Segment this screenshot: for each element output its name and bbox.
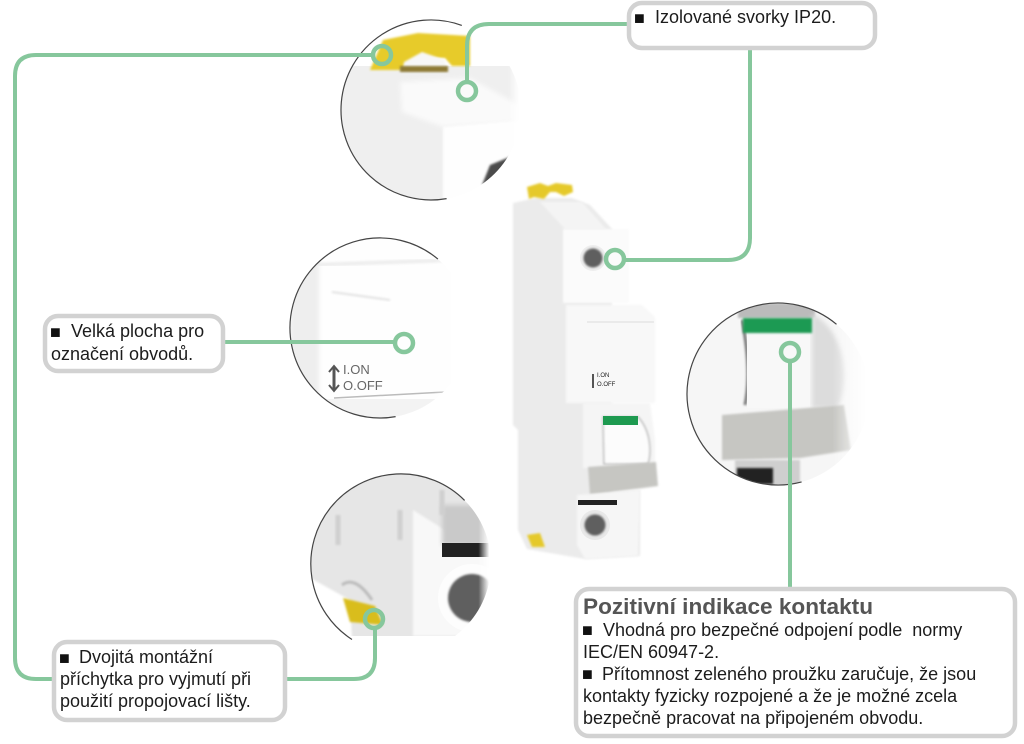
callout: double mounting clip: Dvojitá montážní xyxy=(79,647,213,667)
callout: double mounting clip: ■ xyxy=(59,648,70,668)
callout body text: IEC/EN 60947-2. xyxy=(583,642,719,662)
callout: positive contact indication xyxy=(576,589,1015,736)
callout body text: ■ xyxy=(582,664,593,684)
connector: green indicator line xyxy=(781,343,799,590)
connector: labelling area line xyxy=(222,334,413,352)
circuit breaker product photo: O.OFF xyxy=(597,382,616,388)
callout body text: kontakty fyzicky rozpojené a že je možné zcela xyxy=(583,686,958,706)
callout body text: Přítomnost zeleného proužku zaručuje, že jsou xyxy=(602,664,976,684)
circuit breaker product photo xyxy=(513,183,658,559)
callout: insulated terminals: Izolované svorky IP20. xyxy=(655,7,836,27)
callout heading: Pozitivní indikace kontaktu xyxy=(583,594,873,619)
callout: labelling area: Velká plocha pro xyxy=(71,321,204,341)
callout: labelling area xyxy=(45,316,223,371)
zoom circle: labelling area: I.ON xyxy=(343,362,370,377)
circuit breaker product photo: I.ON xyxy=(597,373,609,379)
connector: lower clip line xyxy=(285,610,383,679)
zoom circle: mounting clip xyxy=(310,473,489,640)
callout: double mounting clip: použití propojovací lišty. xyxy=(60,691,251,711)
zoom circle: green contact indicator xyxy=(687,303,869,486)
callout body text: ■ xyxy=(582,620,593,640)
callout body text: bezpečně pracovat na připojeném obvodu. xyxy=(583,708,923,728)
callout: insulated terminals xyxy=(629,3,875,48)
connector: mounting clip line xyxy=(15,46,391,679)
zoom circle: terminal clamp xyxy=(341,20,523,200)
callout: double mounting clip: příchytka pro vyjmutí při xyxy=(60,669,251,689)
callout body text: Vhodná pro bezpečné odpojení podle normy xyxy=(603,620,962,640)
callout: labelling area: označení obvodů. xyxy=(51,344,193,364)
callout: double mounting clip xyxy=(54,642,285,720)
connector: terminal line to top circle xyxy=(458,24,630,100)
connector: terminal line to breaker xyxy=(606,48,750,268)
callout: labelling area: ■ xyxy=(50,322,61,342)
zoom circle: labelling area: O.OFF xyxy=(343,378,383,393)
callout: insulated terminals: ■ xyxy=(634,8,645,28)
callout body text xyxy=(582,620,976,728)
zoom circle: labelling area xyxy=(289,237,444,419)
